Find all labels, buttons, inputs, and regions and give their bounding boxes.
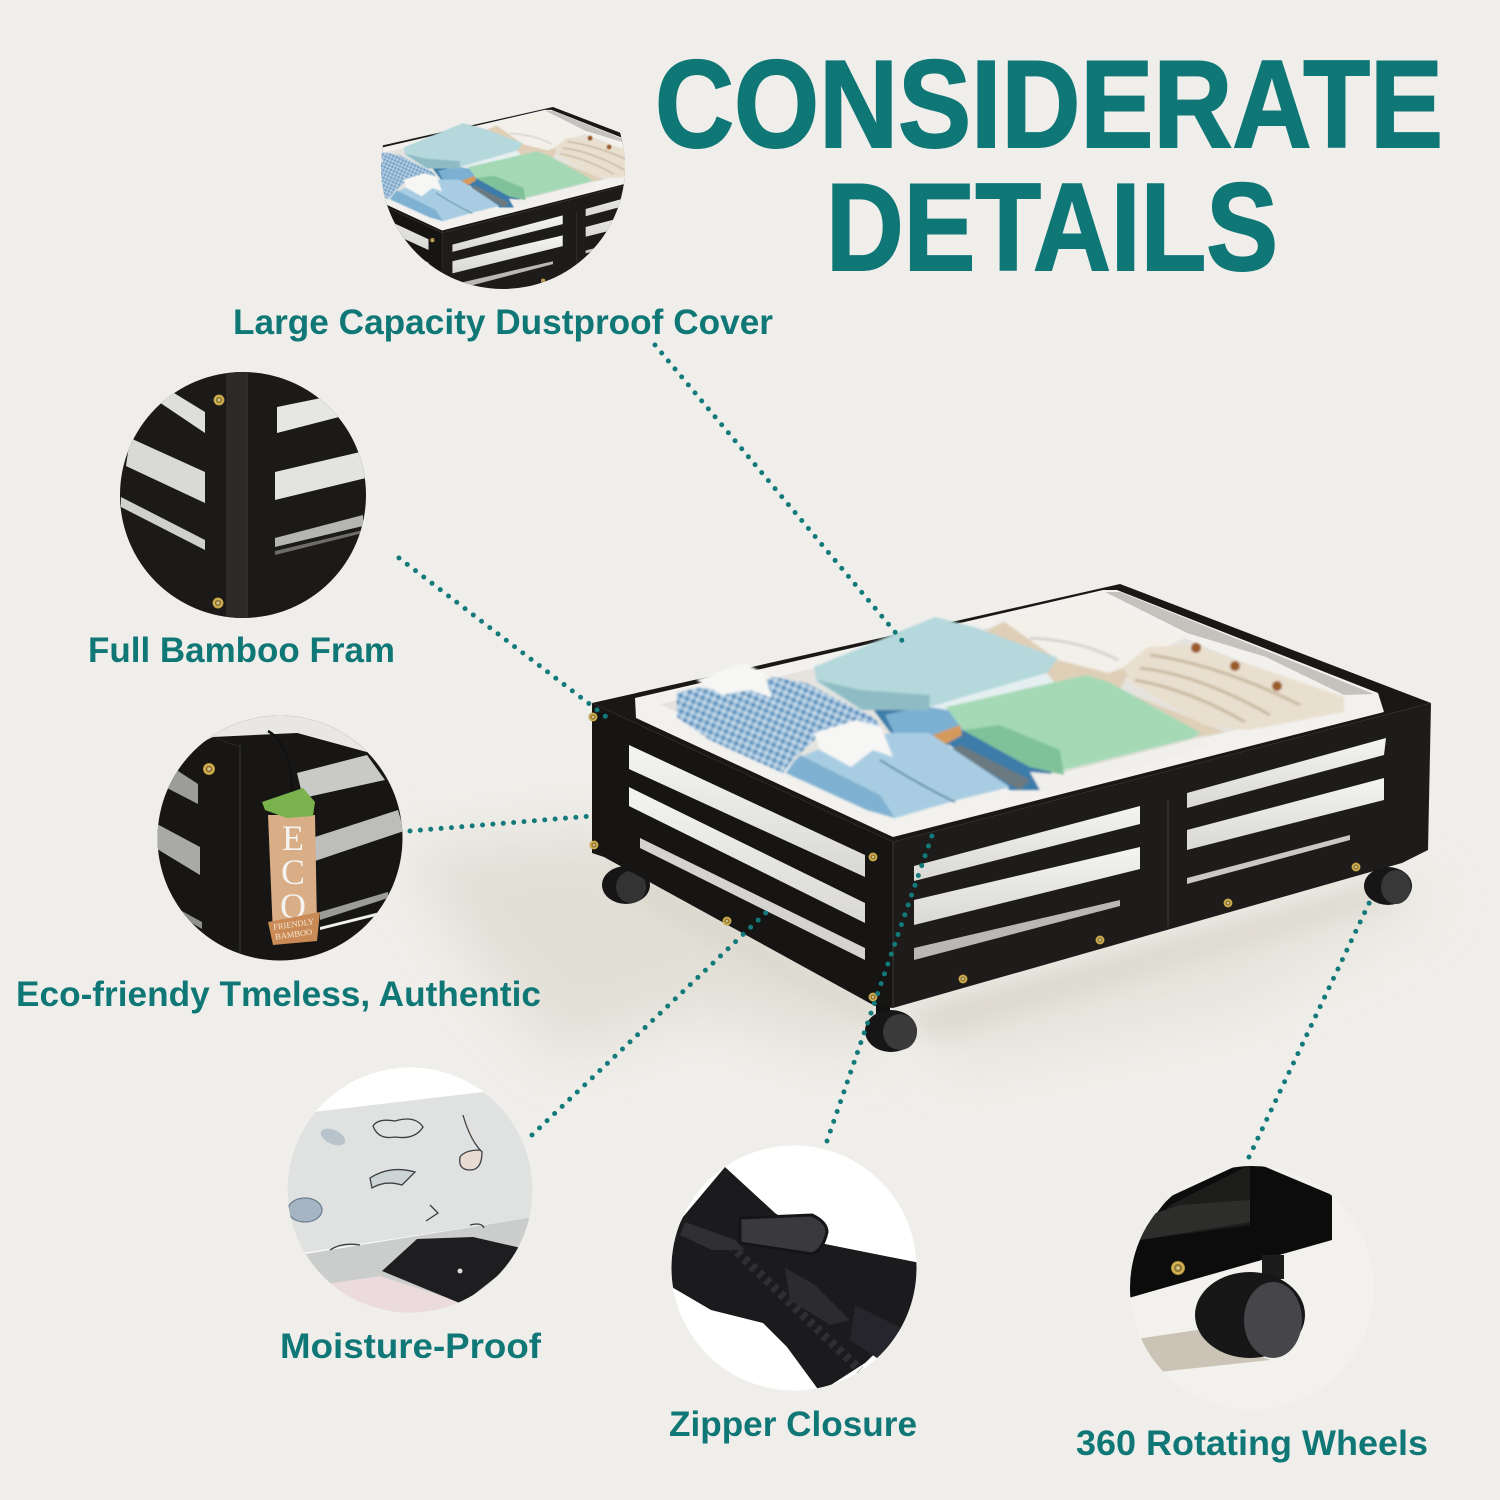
wheel hub xyxy=(1244,1282,1302,1358)
detail circle: dustproof cover xyxy=(381,107,625,289)
frame rim xyxy=(592,584,1431,842)
screw xyxy=(1171,1261,1185,1275)
eco tag body xyxy=(268,815,317,922)
wheel tyre xyxy=(1195,1272,1305,1358)
clothes: centre folded items xyxy=(870,700,1060,790)
zipper tape xyxy=(665,1167,920,1392)
bag floor xyxy=(660,602,1340,815)
eco tag ribbon xyxy=(268,912,320,945)
label: 360 rotating wheels: 360 Rotating Wheels xyxy=(1076,1424,1428,1463)
wheel: back right xyxy=(1364,867,1412,905)
wheel: front xyxy=(865,1000,917,1052)
eco tag ribbon: BAMBOO xyxy=(274,926,313,942)
folded clothes xyxy=(677,597,1344,818)
doodles xyxy=(288,1115,484,1250)
main product: under-bed storage box on wheels xyxy=(588,584,1431,1052)
eco tag lettering: C xyxy=(281,852,305,892)
dotted connector lines xyxy=(399,345,1372,1157)
wheel: back left xyxy=(602,866,650,904)
detail circle: moisture-proof fabric xyxy=(288,1068,532,1312)
clothes: cream cardigan xyxy=(1123,643,1344,730)
frame: left face xyxy=(592,703,893,1008)
fabric lower fold xyxy=(306,1218,530,1312)
zipper slider lower xyxy=(785,1268,850,1325)
clothes: pale blue shirt xyxy=(786,720,1010,818)
floor shadow in wheel crop xyxy=(1130,1330,1270,1372)
zipper teeth xyxy=(730,1245,860,1370)
detail circle: bamboo frame xyxy=(115,368,371,622)
frame: front face xyxy=(893,703,1431,1008)
eco tag leaf xyxy=(262,788,315,818)
brass screws xyxy=(588,712,1360,1002)
fabric seen through front slats xyxy=(893,738,1386,1008)
eco tag lettering xyxy=(282,826,304,918)
label: full bamboo frame: Full Bamboo Fram xyxy=(88,631,395,670)
connector: dustproof cover xyxy=(655,345,905,644)
dark shirt xyxy=(382,1237,530,1304)
connector: eco-friendly xyxy=(410,816,592,831)
label: moisture-proof: Moisture-Proof xyxy=(280,1327,541,1366)
title: DETAILS xyxy=(826,159,1278,297)
clothes: white sweater xyxy=(1002,597,1187,673)
detail circle: eco tag xyxy=(158,716,402,960)
title xyxy=(655,36,1443,297)
label: zipper closure: Zipper Closure xyxy=(669,1405,917,1444)
connector: zipper xyxy=(827,827,935,1141)
detail circle: rotating wheel xyxy=(1130,1166,1332,1372)
fabric seen through left slats xyxy=(629,745,865,960)
connector: wheels xyxy=(1249,897,1372,1157)
floor shadow xyxy=(405,825,1440,1070)
detail circle: zipper closure xyxy=(672,1146,916,1390)
wheel stem xyxy=(1262,1255,1284,1279)
zipper slider top xyxy=(680,1222,745,1250)
connector: bamboo frame xyxy=(399,558,609,719)
pink garment xyxy=(331,1276,458,1312)
eco tag ribbon: FRIENDLY xyxy=(272,916,315,932)
zipper pull tab xyxy=(740,1215,827,1254)
label: eco-friendly: Eco-friendy Tmeless, Authentic xyxy=(16,975,541,1014)
label: large capacity dustproof cover: Large Capacity Dustproof Cover xyxy=(233,303,773,342)
fabric roll xyxy=(280,1092,540,1258)
frame corner xyxy=(1125,1160,1332,1299)
storage bag xyxy=(635,590,1384,837)
clothes: green shirt xyxy=(946,675,1210,792)
connector: moisture-proof xyxy=(532,907,772,1135)
clothes: light teal shirt xyxy=(814,617,1060,712)
clothes: beige stack xyxy=(985,618,1225,745)
eco tag lettering: E xyxy=(282,818,304,858)
eco tag string xyxy=(267,730,274,734)
bag inner wall xyxy=(1105,592,1374,695)
eco tag lettering: O xyxy=(280,886,306,926)
clothes: gingham shirt xyxy=(677,663,881,773)
